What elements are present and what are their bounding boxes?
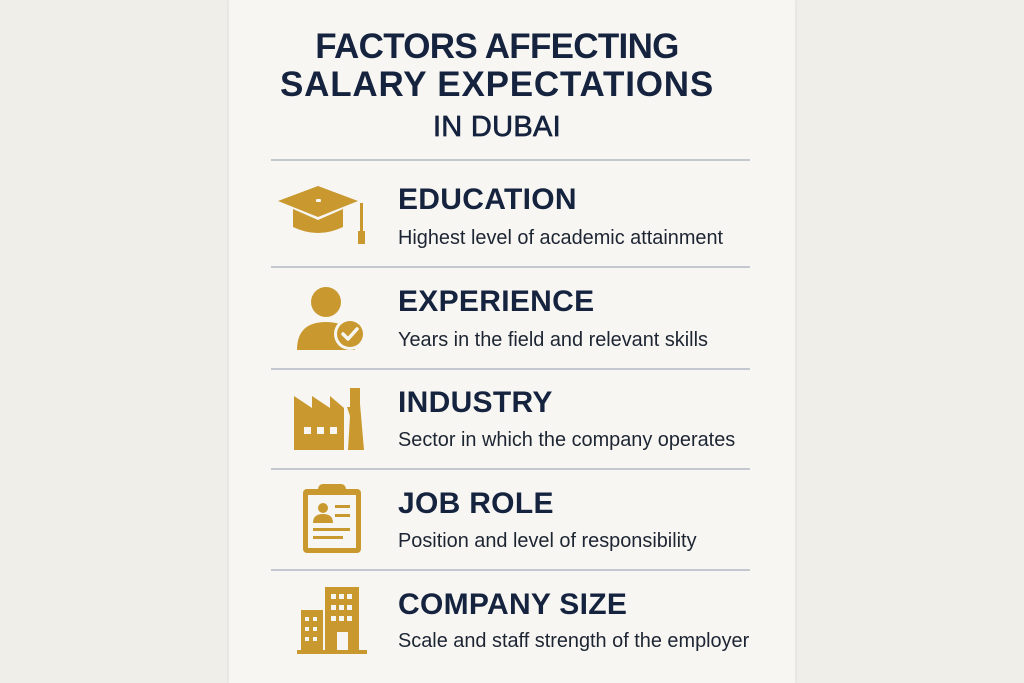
heading: company size: COMPANY SIZE xyxy=(398,588,627,621)
card xyxy=(229,0,795,683)
text: industry: Sector in which the company operates xyxy=(398,429,735,451)
text: FACTORS AFFECTING xyxy=(315,27,679,66)
heading: education: EDUCATION xyxy=(398,183,577,216)
heading: industry: INDUSTRY xyxy=(398,386,553,419)
text: company size: Scale and staff strength of the employer xyxy=(398,630,749,652)
icon: factory xyxy=(294,388,364,450)
text: SALARY EXPECTATIONS xyxy=(280,65,714,104)
icon: buildings xyxy=(297,587,367,654)
icon: clipboard id xyxy=(303,484,361,553)
heading: job role: JOB ROLE xyxy=(398,487,554,520)
title xyxy=(280,27,714,143)
text: job role: Position and level of responsibility xyxy=(398,530,697,552)
icon: graduation cap xyxy=(278,186,365,244)
text: experience: Years in the field and relevant skills xyxy=(398,329,708,351)
text: IN DUBAI xyxy=(433,111,561,143)
heading: experience: EXPERIENCE xyxy=(398,285,594,318)
text: education: Highest level of academic attainment xyxy=(398,227,723,249)
icon: person with check xyxy=(297,287,363,350)
